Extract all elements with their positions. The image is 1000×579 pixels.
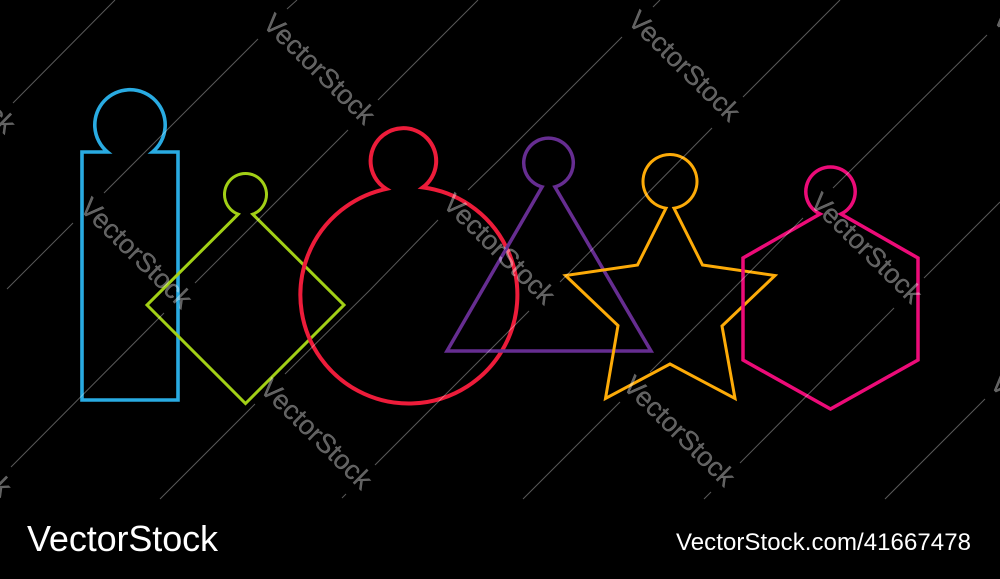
icon: pink hexagon with head [743,167,918,409]
watermark text repeated: VectorStock [74,192,198,315]
icon: blue rectangle with head [82,90,178,400]
watermark text repeated: VectorStock [254,373,378,496]
icon: green diamond with head [147,173,344,404]
watermark text repeated: VectorStock [804,187,928,310]
watermark text repeated: VectorStock [622,5,746,128]
footer image URL: VectorStock.com/41667478 [676,529,971,556]
icon: purple triangle with head [447,138,651,351]
footer logo text: VectorStock [27,518,219,559]
icon: orange star with head [566,154,775,398]
icon: red circle with head [300,128,517,404]
watermark text repeated: VectorStock [437,188,561,311]
watermark text repeated: VectorStock [617,370,741,493]
watermark text repeated: VectorStock [257,8,381,131]
